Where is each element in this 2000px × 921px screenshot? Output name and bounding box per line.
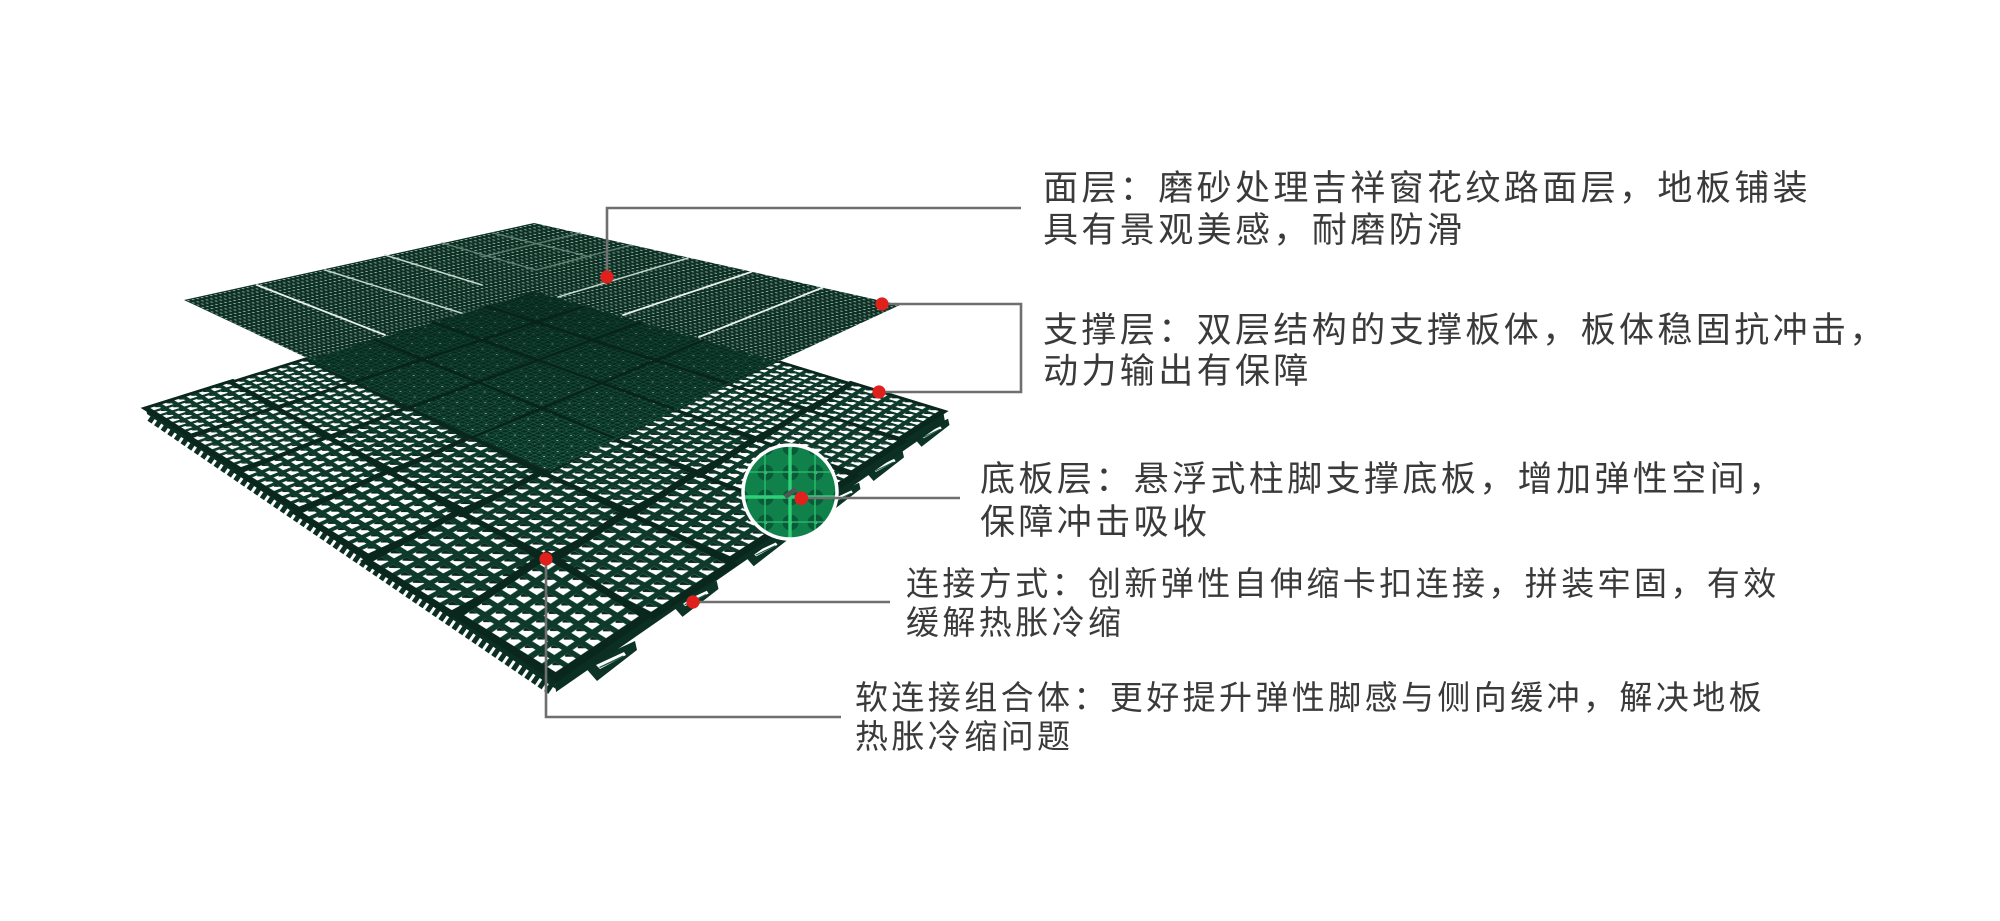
marker dots (539, 270, 889, 609)
text: connection method: 连接方式：创新弹性自伸缩卡扣连接，拼装牢固，有效 (906, 565, 1780, 602)
text: base layer: 保障冲击吸收 (980, 503, 1210, 542)
leader line: surface layer (607, 208, 1021, 277)
base right edge skirt (555, 410, 945, 692)
connector clips along the right edge (583, 419, 950, 681)
support tile grid lines (354, 306, 727, 438)
text: surface layer (1043, 169, 1811, 250)
text: connection method (906, 565, 1780, 641)
text: soft connection assembly: 热胀冷缩问题 (855, 718, 1073, 755)
text: soft connection assembly: 软连接组合体：更好提升弹性脚感与侧向缓冲，解决地板 (855, 679, 1765, 716)
support layer: double-layer mesh plate (307, 292, 778, 471)
base layer: suspended support tiles (145, 291, 949, 692)
text: surface layer: 面层：磨砂处理吉祥窗花纹路面层，地板铺装 (1043, 169, 1811, 208)
leader line: support layer bracket (879, 304, 1021, 392)
leader line: base layer (801, 497, 960, 499)
text: support layer: 支撑层：双层结构的支撑板体，板体稳固抗冲击， (1043, 311, 1888, 350)
text: base layer: 底板层：悬浮式柱脚支撑底板，增加弹性空间， (980, 460, 1786, 499)
text: support layer: 动力输出有保障 (1043, 352, 1312, 391)
base tiles (145, 358, 944, 677)
leader line: connection method (693, 601, 890, 603)
text: base layer (980, 460, 1786, 542)
surface seam lines (257, 233, 824, 337)
infographic: floor layer structure diagram (140, 170, 1861, 751)
leader line: soft connection assembly (546, 559, 841, 717)
top layer: frosted surface sheet (184, 223, 900, 470)
magnified detail lens (740, 440, 840, 544)
base dark body (146, 291, 943, 684)
text: connection method: 缓解热胀冷缩 (906, 604, 1124, 641)
text: soft connection assembly (855, 679, 1765, 755)
base left edge skirt with feet (146, 407, 556, 691)
text: support layer (1043, 311, 1888, 391)
text: surface layer: 具有景观美感，耐磨防滑 (1043, 211, 1465, 250)
